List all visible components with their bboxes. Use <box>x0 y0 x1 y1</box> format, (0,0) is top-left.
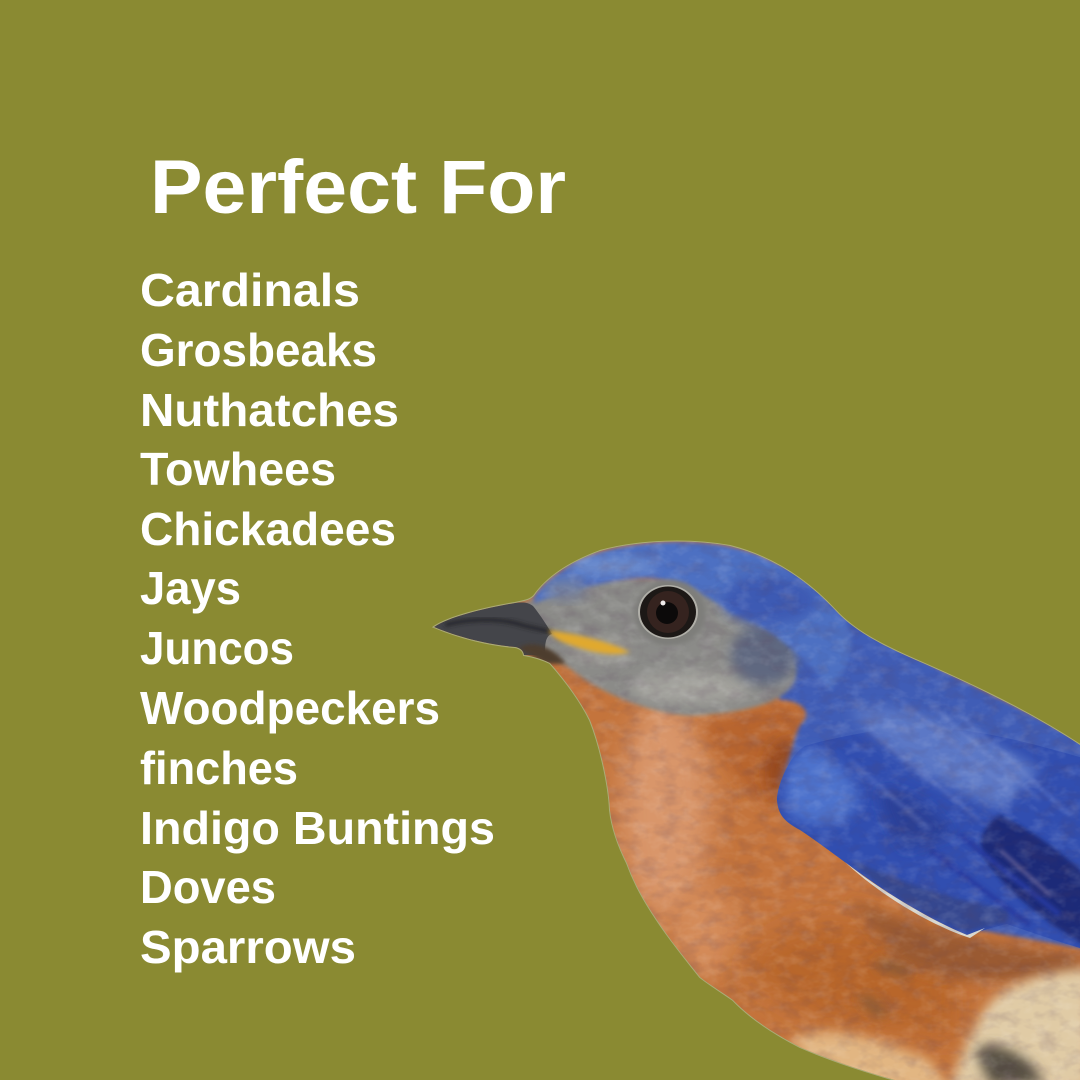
bird list: Chickadees <box>140 503 396 555</box>
bird list: Indigo Buntings <box>140 802 495 854</box>
wing dark primaries <box>981 815 1080 945</box>
wing feather streaks <box>850 700 1070 830</box>
bird list: Grosbeaks <box>140 324 377 376</box>
bird list: Cardinals <box>140 264 360 316</box>
bird list: Jays <box>140 562 241 614</box>
bird list <box>140 264 495 973</box>
illustration: bluebird <box>420 530 1080 1080</box>
yellow gape <box>548 630 630 654</box>
dark flecks on belly <box>975 1046 1045 1080</box>
bird list: Juncos <box>140 622 294 674</box>
back blue <box>769 560 1080 952</box>
pale wing edge <box>845 862 985 938</box>
bird list: Sparrows <box>140 921 356 973</box>
wing <box>777 727 1080 948</box>
bird list: Towhees <box>140 443 336 495</box>
eye <box>634 580 706 646</box>
bird list: finches <box>140 742 298 794</box>
breast <box>420 530 1080 1080</box>
pale belly <box>950 968 1080 1080</box>
title: Perfect For <box>150 145 566 230</box>
bird list: Nuthatches <box>140 384 399 436</box>
crown blue <box>534 542 852 690</box>
bird list: Woodpeckers <box>140 682 440 734</box>
beak <box>434 602 552 655</box>
head grey <box>520 579 796 716</box>
bird list: Doves <box>140 861 276 913</box>
feather texture <box>528 542 1080 1080</box>
